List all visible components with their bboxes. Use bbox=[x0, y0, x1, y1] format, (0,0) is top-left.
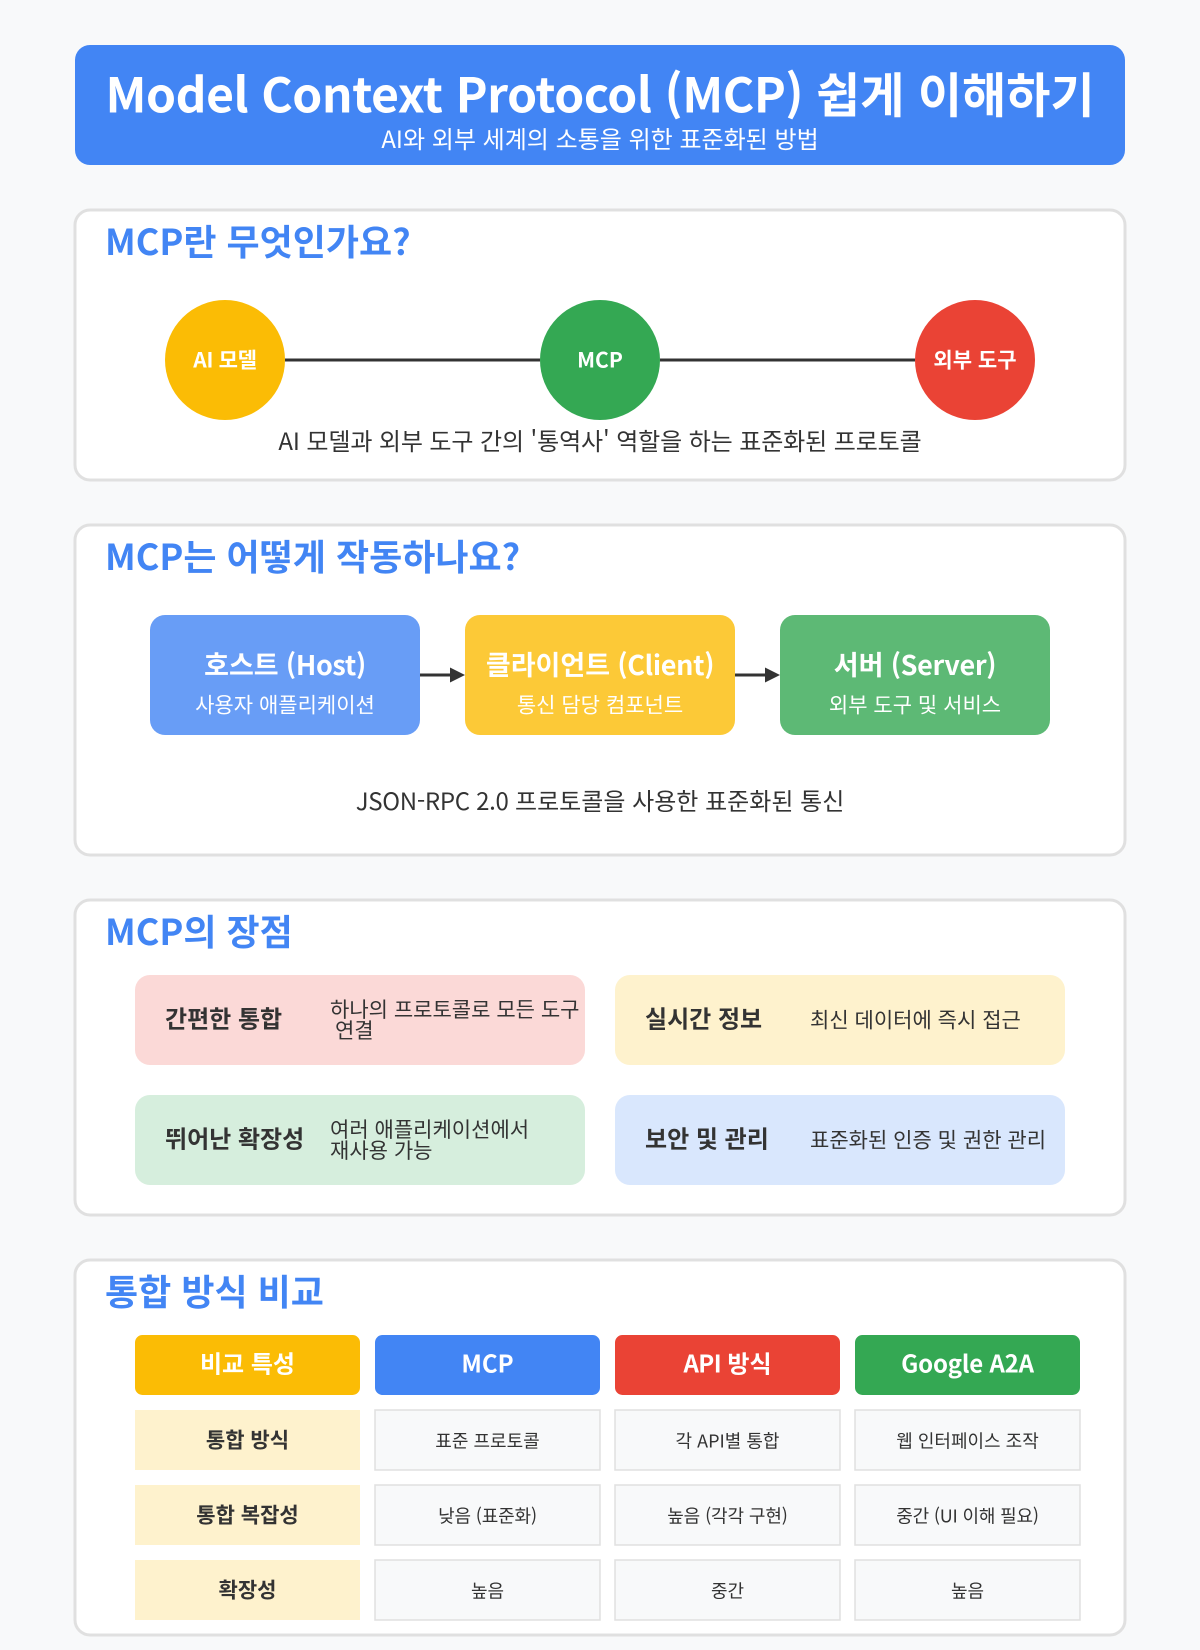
card: extensibility bbox=[135, 1095, 585, 1185]
heading: how it works: MCP는 어떻게 작동하나요? bbox=[105, 529, 520, 581]
card: security bbox=[615, 1095, 1065, 1185]
panel: how MCP works bbox=[75, 525, 1125, 855]
table row: integration method bbox=[135, 1410, 1080, 1470]
table header: API 방식 bbox=[682, 1345, 772, 1380]
table row: extensibility: 높음 bbox=[951, 1578, 984, 1604]
arrow: client to server bbox=[735, 668, 780, 682]
table row: integration method: 표준 프로토콜 bbox=[435, 1428, 540, 1454]
table row: extensibility bbox=[135, 1560, 1080, 1620]
table row: extensibility: 중간 bbox=[711, 1578, 744, 1604]
table row: integration method: 각 API별 통합 bbox=[676, 1428, 779, 1454]
table row: integration method: 통합 방식 bbox=[206, 1425, 289, 1455]
heading: advantages: MCP의 장점 bbox=[105, 904, 293, 956]
node: external tools: 외부 도구 bbox=[933, 345, 1017, 375]
node: AI model bbox=[165, 300, 285, 420]
box: client: 통신 담당 컴포넌트 bbox=[517, 690, 683, 720]
box: host: 호스트 (Host) bbox=[204, 644, 366, 683]
node: MCP: MCP bbox=[577, 345, 623, 375]
arrow: host to client bbox=[420, 668, 465, 682]
card: easy integration: 연결 bbox=[335, 1015, 374, 1045]
card: extensibility: 뛰어난 확장성 bbox=[165, 1120, 304, 1155]
title: Model Context Protocol (MCP) 쉽게 이해하기 bbox=[105, 57, 1095, 127]
panel: advantages bbox=[75, 900, 1125, 1215]
table row: complexity: 중간 (UI 이해 필요) bbox=[896, 1503, 1039, 1529]
card: security: 표준화된 인증 및 권한 관리 bbox=[810, 1125, 1046, 1155]
card: real-time information: 실시간 정보 bbox=[645, 1000, 762, 1035]
card: easy integration bbox=[135, 975, 585, 1065]
box: server bbox=[780, 615, 1050, 735]
heading: comparison: 통합 방식 비교 bbox=[105, 1264, 324, 1316]
card: easy integration: 간편한 통합 bbox=[165, 1000, 282, 1035]
box: client bbox=[465, 615, 735, 735]
box: client: 클라이언트 (Client) bbox=[486, 644, 714, 683]
table row: extensibility: 확장성 bbox=[219, 1575, 276, 1605]
table header bbox=[135, 1335, 1080, 1395]
table row: complexity: 통합 복잡성 bbox=[196, 1500, 299, 1530]
caption: AI 모델과 외부 도구 간의 '통역사' 역할을 하는 표준화된 프로토콜 bbox=[278, 422, 922, 457]
title banner bbox=[75, 45, 1125, 165]
table row: extensibility: 높음 bbox=[471, 1578, 504, 1604]
table header: Google A2A bbox=[901, 1345, 1035, 1380]
box: host bbox=[150, 615, 420, 735]
subtitle: AI와 외부 세계의 소통을 위한 표준화된 방법 bbox=[381, 120, 819, 155]
card: easy integration: 하나의 프로토콜로 모든 도구 bbox=[330, 994, 579, 1024]
card: extensibility: 재사용 가능 bbox=[330, 1135, 432, 1165]
caption: JSON-RPC 2.0 프로토콜을 사용한 표준화된 통신 bbox=[356, 782, 844, 817]
panel: what is MCP bbox=[75, 210, 1125, 480]
node: AI model: AI 모델 bbox=[192, 345, 257, 375]
table row: complexity bbox=[135, 1485, 1080, 1545]
panel: comparison bbox=[75, 1260, 1125, 1635]
table row: complexity: 높음 (각각 구현) bbox=[667, 1503, 788, 1529]
card: real-time information: 최신 데이터에 즉시 접근 bbox=[810, 1005, 1021, 1035]
card: security: 보안 및 관리 bbox=[645, 1120, 769, 1155]
heading: what is MCP: MCP란 무엇인가요? bbox=[105, 214, 411, 266]
box: server: 외부 도구 및 서비스 bbox=[829, 690, 1001, 720]
card: extensibility: 여러 애플리케이션에서 bbox=[330, 1114, 529, 1144]
node: external tools bbox=[915, 300, 1035, 420]
box: server: 서버 (Server) bbox=[834, 644, 996, 683]
table row: integration method: 웹 인터페이스 조작 bbox=[896, 1428, 1039, 1454]
table row: complexity: 낮음 (표준화) bbox=[438, 1503, 537, 1529]
connector lines bbox=[285, 359, 915, 361]
card: real-time information bbox=[615, 975, 1065, 1065]
box: host: 사용자 애플리케이션 bbox=[195, 690, 375, 720]
node: MCP bbox=[540, 300, 660, 420]
table header: 비교 특성 bbox=[200, 1345, 295, 1380]
table header: MCP bbox=[461, 1345, 514, 1380]
